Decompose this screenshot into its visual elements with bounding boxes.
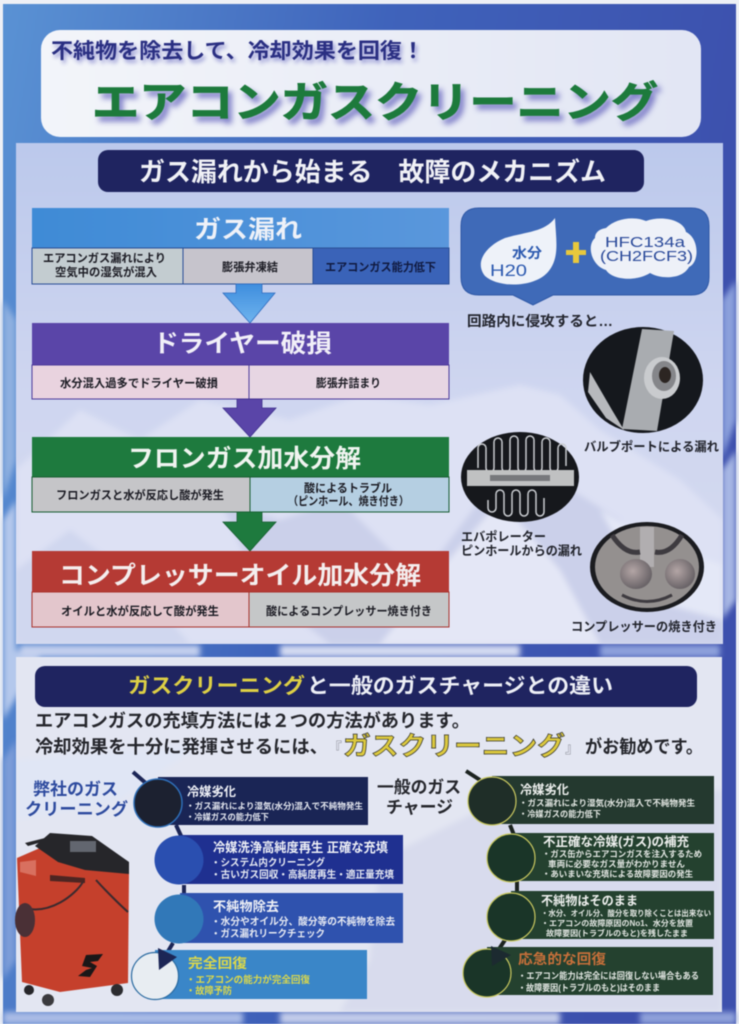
label: evaporator pinhole leak: ピンホールからの漏れ: [461, 543, 582, 558]
label: valve port leak: バルブポートによる漏れ: [584, 439, 719, 454]
label: our gas cleaning: クリーニング: [25, 799, 128, 819]
box: compressor oil hydrolysis: オイルと水が反応して酸が発生: [61, 604, 219, 618]
box: dryer damage: [32, 323, 449, 399]
label: general gas charge: [377, 778, 461, 817]
box: gas leak: 膨張弁凍結: [222, 260, 278, 274]
box: gas leak: ガス漏れ: [194, 216, 302, 244]
intro text: 冷却効果を十分に発揮させるには、: [35, 737, 328, 757]
step 2: 車両に必要なガス量がわかりません: [548, 859, 686, 869]
box: refrigerant hydrolysis: [32, 437, 449, 512]
box: compressor oil hydrolysis: コンプレッサーオイル加水分解: [59, 562, 421, 590]
intro text: 『: [328, 740, 342, 756]
main title: エアコンガスクリーニング: [92, 79, 658, 126]
box: gas leak: 空気中の湿気が混入: [55, 265, 157, 279]
step 2: 不正確な冷媒(ガス)の補充: [543, 834, 689, 849]
intro text: がお勧めです。: [585, 736, 703, 757]
heading bar: ガス漏れから始まる 故障のメカニズム: [139, 157, 606, 187]
timeline: gas cleaning: [132, 772, 403, 1000]
arrow head: [491, 946, 511, 966]
step 3: ・ガス漏れリークチェック: [211, 927, 325, 940]
step 3: [487, 891, 714, 941]
icon: gas cloud: HFC134a: [605, 234, 686, 251]
photo: evaporator: [461, 432, 579, 522]
step 4: 応急的な回復: [518, 951, 606, 967]
step 2: 冷媒洗浄高純度再生 正確な充填: [213, 840, 388, 855]
heading bar: と一般のガスチャージとの違い: [307, 675, 613, 698]
subtitle: 不純物を除去して、冷却効果を回復！: [51, 40, 424, 63]
arrow head: [158, 948, 177, 970]
box: dryer damage: 膨張弁詰まり: [316, 376, 381, 390]
step 3: [154, 893, 403, 944]
box: refrigerant hydrolysis: 酸によるトラブル: [304, 481, 392, 495]
arrow: hydrolysis to oil: [223, 512, 276, 551]
arrow: dryer to hydrolysis: [223, 399, 276, 437]
step 1: ・冷媒ガスの能力低下: [186, 812, 269, 822]
icon: water drop: [481, 218, 556, 285]
box: gas leak: エアコンガス漏れにより: [43, 251, 166, 265]
step 2: ・古いガス回収・高純度再生・適正量充填: [211, 868, 394, 881]
step 3: ・エアコンの故障原因のNo1、水分を放置: [541, 918, 693, 928]
mountain backdrop: [16, 385, 723, 644]
step 2: [154, 835, 403, 884]
step 2: [487, 833, 714, 882]
step 4: ・エアコン能力は完全には回復しない場合もある: [518, 970, 699, 981]
step 3: 不純物はそのまま: [541, 893, 638, 908]
callout: water plus HFC134a: [461, 208, 709, 305]
photo: valve port: [583, 327, 703, 433]
label: general gas charge: チャージ: [386, 798, 453, 817]
step 3: ・水分やオイル分、酸分等の不純物を除去: [211, 915, 395, 928]
heading bar: [98, 150, 644, 192]
intro text: エアコンガスの充填方法には２つの方法があります。: [35, 710, 470, 731]
text: on entering the circuit: 回路内に侵攻すると…: [467, 313, 613, 329]
box: gas leak: [32, 208, 449, 284]
box: dryer damage: 水分混入過多でドライヤー破損: [60, 376, 218, 390]
connector line: [466, 771, 517, 952]
box: refrigerant hydrolysis: フロンガスと水が反応し酸が発生: [56, 488, 224, 502]
intro text: [35, 710, 703, 761]
icon: plus sign: [566, 242, 586, 263]
arrow: gas leak to dryer: [223, 284, 275, 323]
panel: comparison: [15, 657, 722, 1012]
step 1: [468, 776, 714, 825]
label: our gas cleaning: 弊社のガス: [33, 780, 118, 799]
heading bar: [35, 666, 697, 707]
connector line: [133, 772, 184, 958]
step 3: 不純物除去: [213, 899, 279, 914]
step 1: 冷媒劣化: [520, 782, 569, 797]
icon: gas cloud: [591, 218, 697, 279]
step 4: [132, 950, 367, 1000]
step 2: ・ガス缶からエアコンガスを注入するため: [542, 849, 702, 859]
label: our gas cleaning: [25, 780, 128, 819]
step 4: ・故障予防: [186, 985, 232, 997]
heading bar: ガスクリーニング: [128, 674, 305, 698]
box: refrigerant hydrolysis: フロンガス加水分解: [128, 445, 361, 473]
box: compressor oil hydrolysis: 酸によるコンプレッサー焼き付き: [266, 604, 432, 618]
photo: compressor seizure: [590, 522, 704, 612]
step 3: 故障要因(トラブルのもと)を残したまま: [546, 928, 688, 938]
step 4: ・故障要因(トラブルのもと)はそのまま: [518, 982, 660, 993]
box: refrigerant hydrolysis: （ピンホール、焼き付き）: [288, 494, 409, 508]
step 1: ・ガス漏れにより湿気(水分)混入で不純物発生: [186, 801, 363, 811]
box: gas leak: エアコンガス能力低下: [325, 260, 436, 274]
cleaning machine: [15, 833, 129, 1006]
step 1: ・ガス漏れにより湿気(水分)混入で不純物発生: [519, 798, 695, 808]
step 1: ・冷媒ガスの能力低下: [519, 809, 601, 819]
step 2: ・システム内クリーニング: [211, 856, 325, 869]
step 2: ・あいまいな充填による故障要因の発生: [542, 869, 693, 879]
label: evaporator pinhole leak: エバポレーター: [461, 529, 546, 544]
label: compressor seizure: コンプレッサーの焼き付き: [571, 619, 717, 634]
box: compressor oil hydrolysis: [32, 551, 449, 627]
intro text: ガスクリーニング: [343, 731, 565, 761]
header panel: [41, 30, 701, 137]
icon: water drop: 水分: [512, 245, 542, 261]
label: evaporator pinhole leak: [461, 529, 582, 558]
step 3: ・水分、オイル分、酸分を取り除くことは出来ない: [541, 908, 711, 918]
step 4: 完全回復: [188, 955, 248, 971]
step 4: ・エアコンの能力が完全回復: [186, 974, 310, 986]
step 1: 冷媒劣化: [187, 784, 236, 799]
intro text: 』: [565, 740, 579, 756]
panel: failure mechanism: [16, 143, 723, 644]
step 1: [134, 777, 368, 827]
timeline: general charge: [463, 771, 714, 997]
icon: water drop: H20: [490, 261, 527, 280]
step 4: [463, 947, 713, 997]
box: dryer damage: ドライヤー破損: [153, 330, 332, 358]
label: general gas charge: 一般のガス: [377, 778, 461, 797]
icon: gas cloud: (CH2FCF3): [600, 248, 693, 265]
